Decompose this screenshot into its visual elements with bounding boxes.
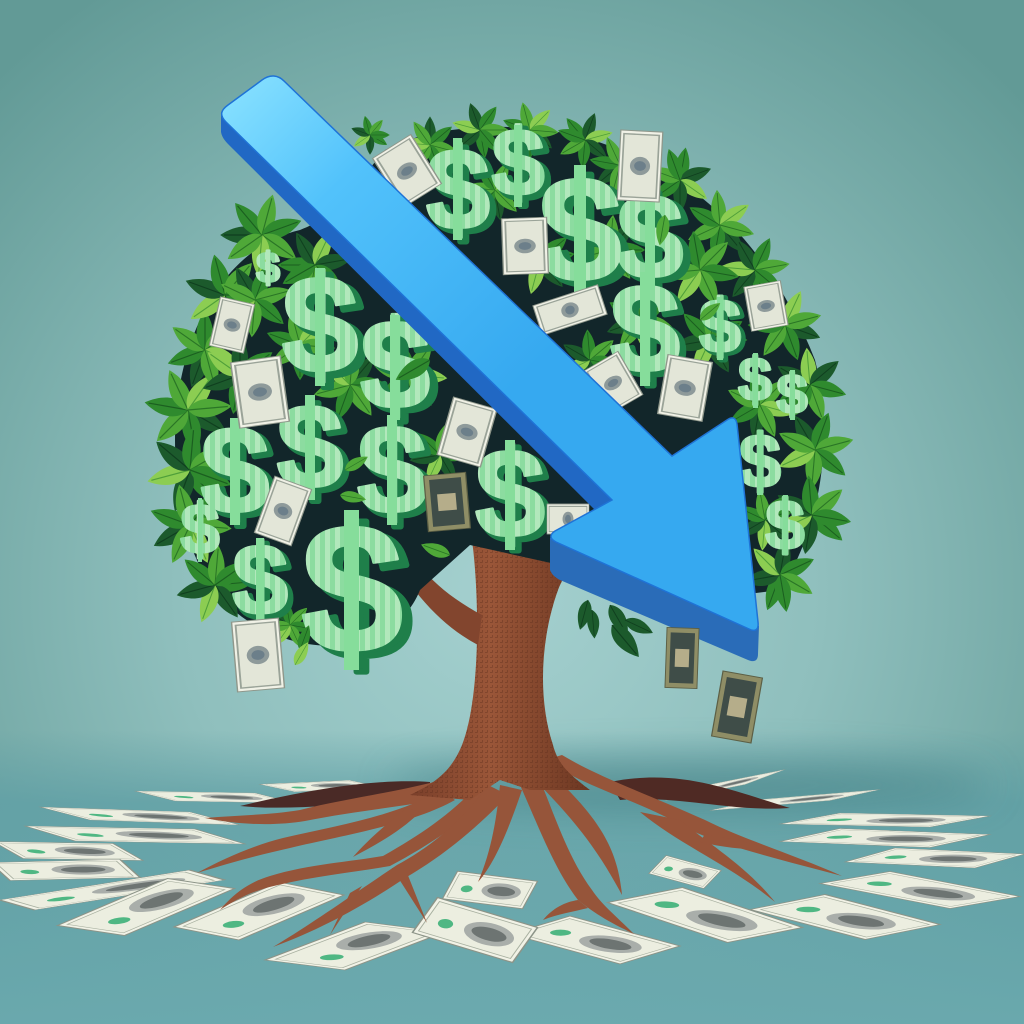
dollar signs: $ (623, 174, 689, 308)
ground (0, 730, 1024, 1024)
dollar sign vertical bars (198, 125, 795, 670)
dollar signs: $ (367, 298, 437, 439)
dollar signs: $ (236, 528, 292, 640)
arrow head side (550, 535, 759, 661)
dollar signs: $ (702, 286, 744, 370)
dollar signs: $ (545, 150, 629, 318)
dollar signs: $ (426, 126, 490, 254)
ground shadow (390, 761, 990, 809)
dollar signs: $ (475, 423, 545, 564)
dollar signs: $ (777, 363, 807, 425)
dollar signs: $ (615, 262, 685, 403)
dollar signs (181, 110, 807, 697)
dollar signs: $ (766, 486, 804, 564)
dollar signs: $ (360, 294, 430, 435)
dollar signs: $ (538, 145, 622, 313)
tree trunk (385, 530, 590, 800)
arrow shaft side (221, 110, 612, 515)
falling bills (665, 627, 762, 743)
small leaves over the dollars (290, 214, 724, 668)
tree roots (197, 755, 842, 947)
foliage clusters (131, 90, 871, 657)
dollar signs: $ (739, 419, 781, 503)
money scattered on the ground (0, 770, 1024, 970)
dollar signs: $ (289, 253, 365, 407)
arrow top face (222, 76, 758, 630)
left tree branch (385, 530, 482, 645)
leaves hanging below the arrow (574, 598, 656, 663)
dollar signs: $ (480, 427, 550, 568)
bills caught in the foliage (209, 130, 788, 692)
blue downward arrow (221, 76, 759, 661)
dollar signs: $ (201, 402, 269, 540)
dollar signs: $ (738, 346, 772, 413)
dollar signs: $ (277, 380, 343, 514)
dollar signs: $ (282, 248, 358, 402)
dollar signs: $ (492, 110, 544, 216)
dollar signs: $ (431, 130, 495, 258)
dollar signs: $ (357, 399, 427, 540)
dollar signs: $ (362, 403, 432, 544)
dollar signs: $ (181, 490, 219, 568)
canopy mass (175, 127, 824, 646)
dollar signs: $ (699, 284, 741, 368)
dollar signs: $ (617, 170, 683, 304)
dollar signs: $ (282, 384, 348, 518)
dollar signs: $ (497, 114, 549, 220)
dollar signs: $ (232, 524, 288, 636)
dollar signs: $ (301, 485, 403, 691)
dollar signs: $ (256, 244, 280, 291)
dollar signs: $ (610, 258, 680, 399)
dollar signs: $ (310, 491, 412, 697)
dollar signs: $ (206, 406, 274, 544)
